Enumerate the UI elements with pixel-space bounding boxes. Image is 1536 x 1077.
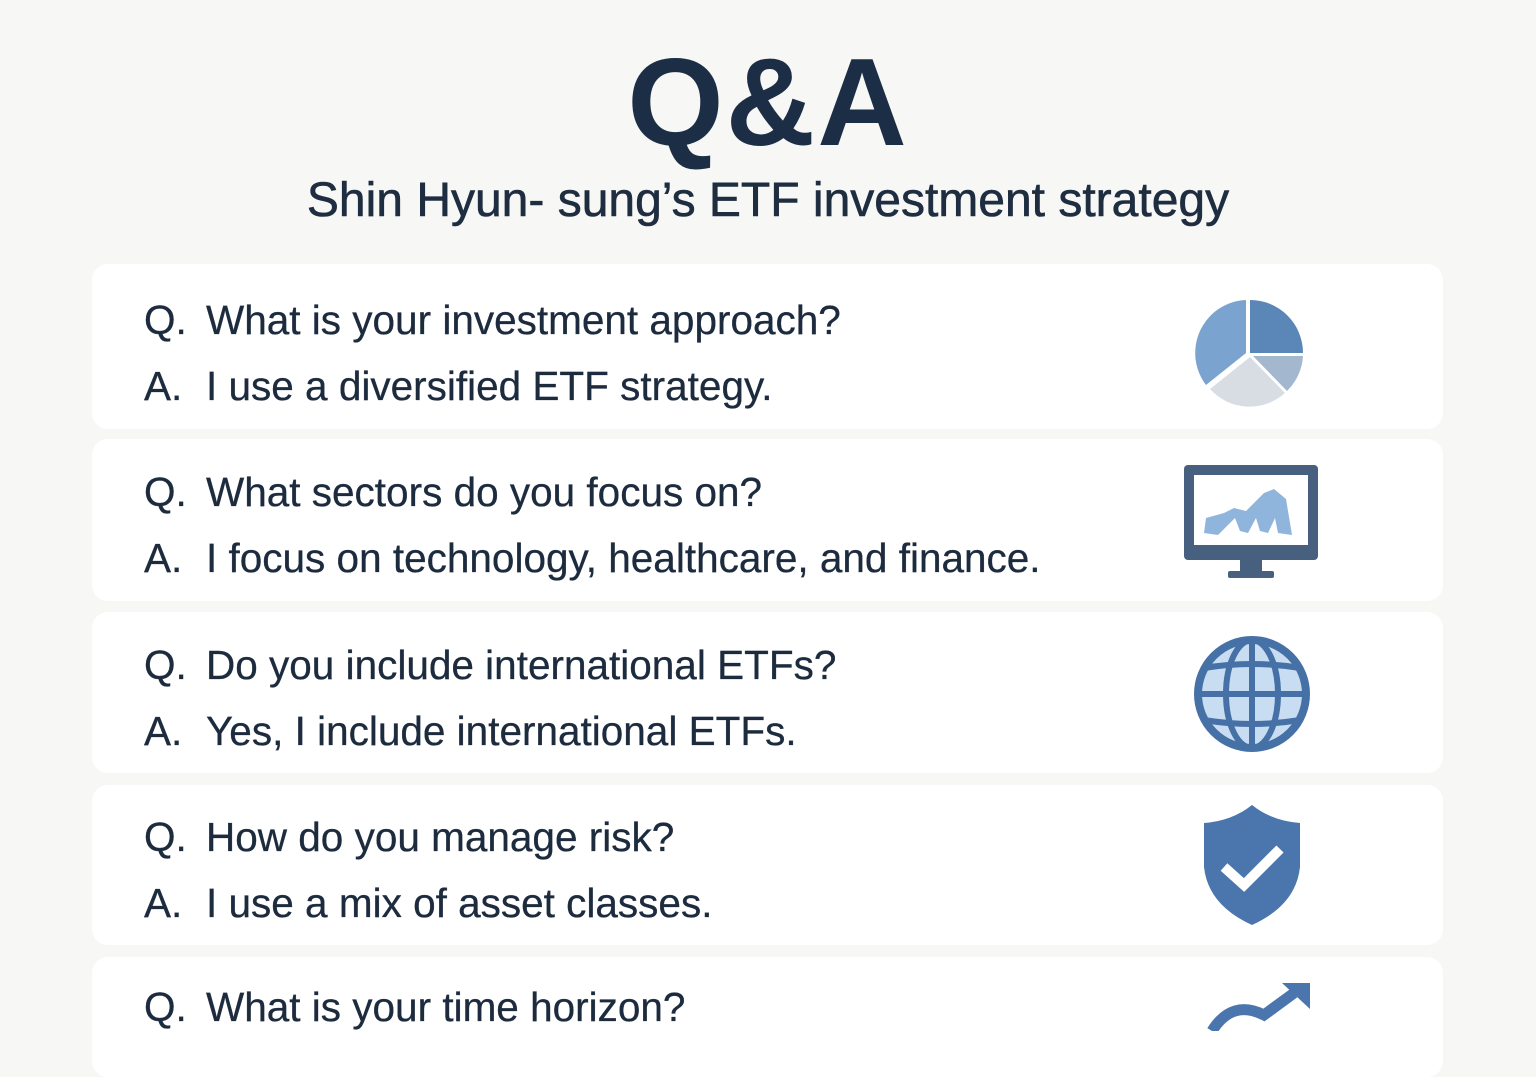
- answer 4: I use a mix of asset classes.: [206, 880, 712, 926]
- question 5: Q.: [144, 984, 187, 1030]
- answer 3: A.: [144, 708, 182, 754]
- question 1: What is your investment approach?: [206, 297, 841, 343]
- answer 2: A.: [144, 535, 182, 581]
- question 5: What is your time horizon?: [206, 984, 685, 1030]
- panel: sectors: [92, 439, 1443, 601]
- answer 4: A.: [144, 880, 182, 926]
- icon: globe: [1194, 636, 1310, 752]
- question 2: Q.: [144, 469, 187, 515]
- answer 1: I use a diversified ETF strategy.: [206, 363, 772, 409]
- question 2: What sectors do you focus on?: [206, 469, 762, 515]
- title: Q&A: [627, 34, 909, 172]
- answer 1: A.: [144, 363, 182, 409]
- panel: approach: [92, 264, 1443, 429]
- question 4: Q.: [144, 814, 187, 860]
- subtitle: Shin Hyun- sung’s ETF investment strategy: [307, 174, 1229, 227]
- icon: pie chart: [1195, 300, 1303, 407]
- answer 3: Yes, I include international ETFs.: [206, 708, 797, 754]
- question 3: Do you include international ETFs?: [206, 642, 836, 688]
- panel: time horizon: [92, 957, 1443, 1077]
- question 1: Q.: [144, 297, 187, 343]
- icon: shield: [1204, 805, 1300, 925]
- icon: monitor: [1184, 465, 1318, 578]
- answer 2: I focus on technology, healthcare, and finance.: [206, 535, 1041, 581]
- panel: international: [92, 612, 1443, 773]
- panel: risk: [92, 785, 1443, 945]
- icon: growth arrow: [1207, 983, 1310, 1031]
- question 3: Q.: [144, 642, 187, 688]
- question 4: How do you manage risk?: [206, 814, 674, 860]
